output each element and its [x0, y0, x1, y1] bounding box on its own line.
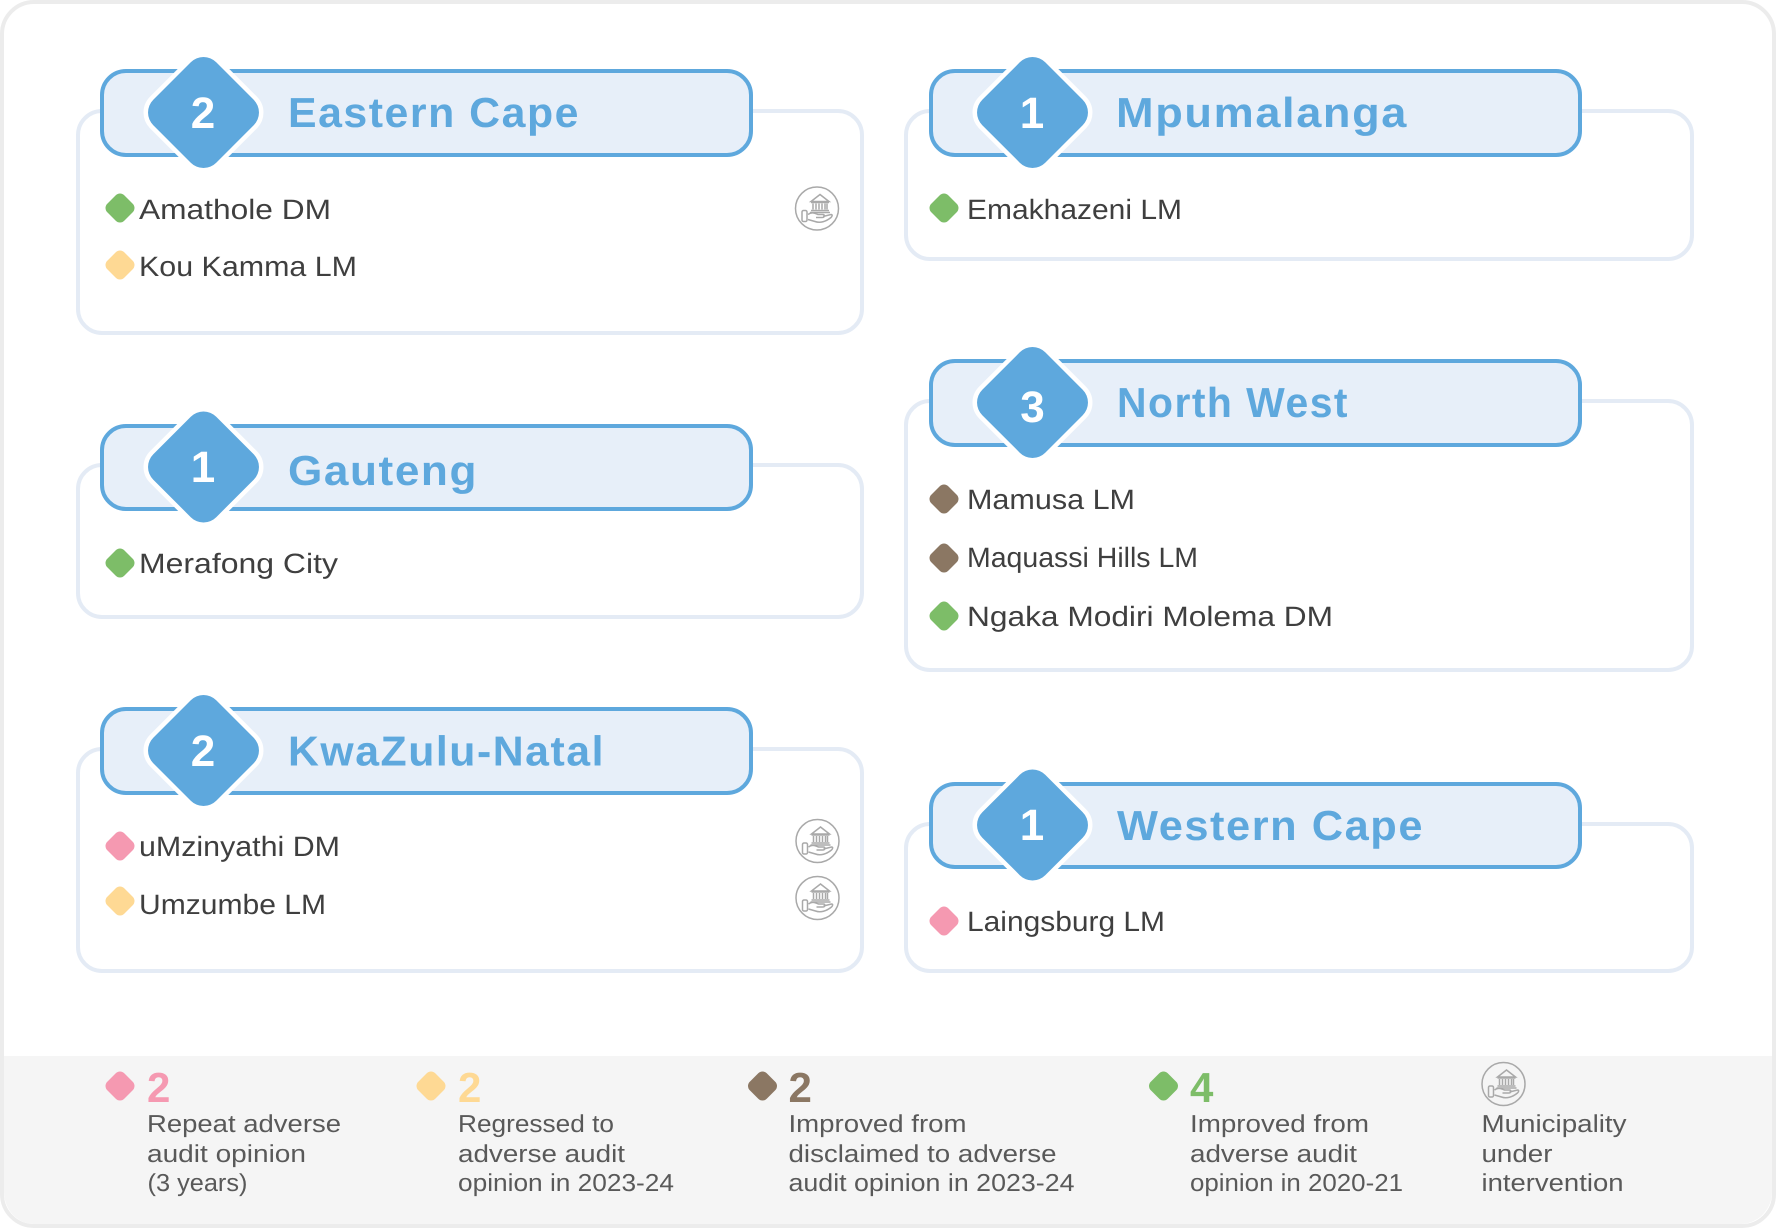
item: Amathole DM	[103, 191, 331, 225]
legend: improved from adverse: Improved from	[1190, 1111, 1369, 1138]
panel: Eastern Cape: Eastern Cape	[288, 89, 580, 136]
panel: Mpumalanga: 1	[1020, 89, 1044, 138]
legend: repeat adverse	[103, 1064, 341, 1197]
legend: regressed: 2	[458, 1064, 481, 1111]
legend: regressed: opinion in 2023-24	[458, 1170, 674, 1197]
item: Umzumbe LM: Umzumbe LM	[139, 889, 326, 920]
item: Emakhazeni LM: Emakhazeni LM	[967, 194, 1182, 225]
panel: Gauteng: Gauteng	[288, 447, 478, 494]
legend: municipality under intervention: Municipality	[1482, 1111, 1627, 1138]
legend: improved from disclaimed: disclaimed to adverse	[788, 1141, 1056, 1168]
legend: improved from disclaimed: Improved from	[788, 1111, 966, 1138]
item: Merafong City: Merafong City	[139, 548, 338, 579]
legend: municipality under intervention: under	[1482, 1141, 1552, 1168]
panel: North West: North West	[1117, 379, 1349, 426]
item: Merafong City	[103, 546, 338, 580]
item: Umzumbe LM	[103, 884, 326, 920]
legend: improved from adverse: adverse audit	[1190, 1141, 1357, 1168]
legend: repeat adverse: audit opinion	[147, 1141, 306, 1168]
legend: improved from adverse: opinion in 2020-21	[1190, 1170, 1403, 1197]
icon: Umzumbe intervention	[796, 876, 839, 920]
item: Amathole DM: Amathole DM	[139, 194, 331, 225]
legend: improved from adverse	[1147, 1064, 1403, 1197]
panel: Eastern Cape	[78, 50, 862, 333]
item: Kou Kamma LM: Kou Kamma LM	[139, 251, 357, 282]
legend: regressed: Regressed to	[458, 1111, 614, 1138]
legend: regressed	[414, 1064, 674, 1197]
legend: improved from disclaimed	[746, 1064, 1074, 1197]
legend: municipality under intervention	[1482, 1062, 1627, 1197]
legend: repeat adverse: 2	[147, 1064, 170, 1111]
icon: municipality under intervention	[796, 187, 838, 230]
panel: Gauteng	[78, 404, 862, 617]
item: Ngaka Modiri Molema DM: Ngaka Modiri Molema DM	[967, 601, 1333, 632]
panel: Western Cape: Western Cape	[1117, 802, 1424, 849]
panel: Mpumalanga	[906, 50, 1692, 259]
legend: improved from adverse: 4	[1190, 1064, 1214, 1111]
panel: Mpumalanga: Mpumalanga	[1116, 89, 1408, 136]
icon: uMzinyathi intervention	[796, 820, 839, 862]
panel: KwaZulu-Natal: 2	[191, 727, 215, 776]
item: Laingsburg LM: Laingsburg LM	[967, 906, 1165, 937]
panel: Gauteng: 1	[191, 443, 215, 492]
legend: municipality under intervention: intervention	[1482, 1170, 1624, 1197]
legend: repeat adverse: (3 years)	[148, 1170, 248, 1197]
item: Mamusa LM: Mamusa LM	[967, 484, 1135, 515]
panel: legend	[4, 1056, 1772, 1224]
panel: North West: 3	[1020, 383, 1045, 432]
legend: improved from disclaimed: audit opinion in 2023-24	[788, 1170, 1074, 1197]
panel: Western Cape: 1	[1020, 801, 1044, 850]
item: Mamusa LM	[927, 482, 1135, 516]
panel: KwaZulu-Natal: KwaZulu-Natal	[288, 728, 605, 774]
legend: regressed: adverse audit	[458, 1141, 625, 1168]
panel: North West	[906, 340, 1692, 670]
legend: improved from disclaimed: 2	[788, 1064, 812, 1111]
legend: repeat adverse: Repeat adverse	[147, 1111, 341, 1138]
panel: Eastern Cape: 2	[191, 89, 215, 138]
panel: Western Cape	[906, 762, 1692, 971]
item: Maquassi Hills LM: Maquassi Hills LM	[967, 542, 1198, 573]
item: uMzinyathi DM: uMzinyathi DM	[139, 831, 340, 862]
panel: KwaZulu-Natal	[78, 688, 862, 971]
